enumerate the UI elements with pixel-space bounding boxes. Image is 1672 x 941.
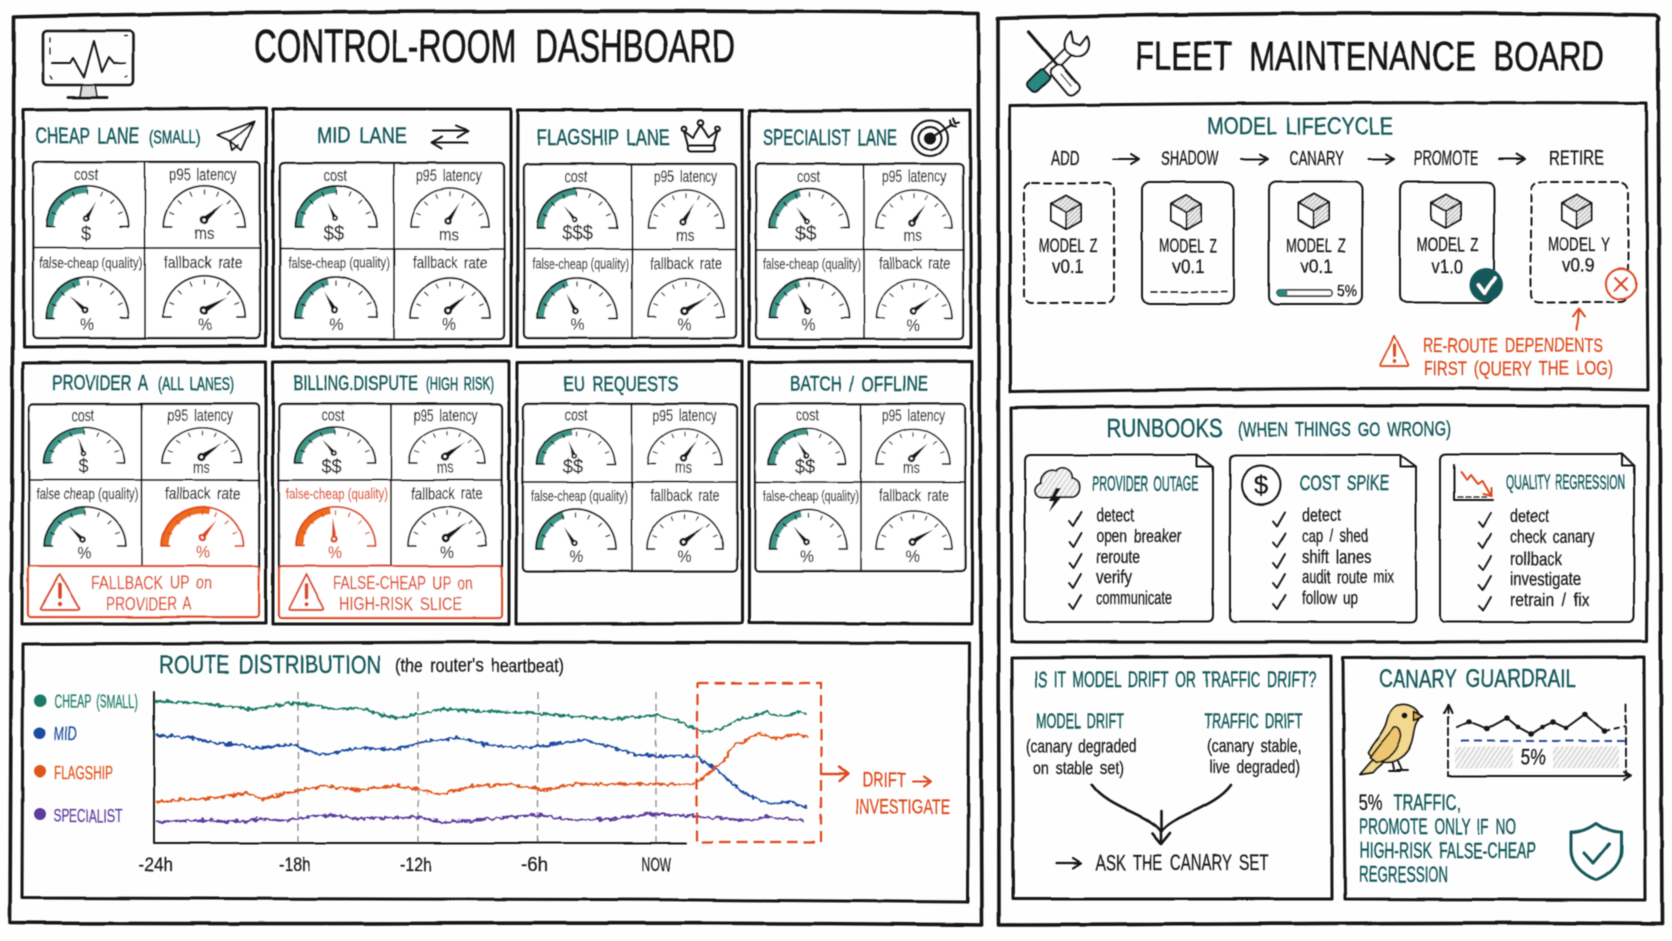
gauge: fallback rate: % (678, 547, 692, 566)
heading: cheap lane: CHEAP LANE (35, 123, 139, 148)
runbook: cost spike (1230, 455, 1416, 622)
checklist: investigate (1510, 569, 1581, 589)
title: control-room dashboard: CONTROL-ROOM DASHBOARD (254, 20, 735, 72)
gauge: cost (537, 406, 615, 478)
gauge: p95 latency: p95 latency (414, 406, 478, 425)
heading: route distribution: ROUTE DISTRIBUTION (159, 651, 381, 679)
callout: drift window (697, 683, 821, 842)
arrow: merging paths to canary set (1092, 785, 1231, 844)
icon: target with arrow (912, 118, 959, 156)
checklist (1273, 505, 1394, 609)
text: traffic drift: TRAFFIC DRIFT (1204, 710, 1303, 733)
gauge: false-cheap: false-cheap (quality) (288, 255, 390, 272)
gauge: p95 latency (876, 406, 950, 477)
gauge: p95 latency: ms (904, 226, 922, 245)
gauge: false-cheap: false-cheap (quality) (763, 256, 861, 273)
gauge grid: eu requests (523, 404, 737, 571)
checklist: detect (1302, 505, 1341, 525)
gauge grid: batch / offline (755, 404, 965, 571)
gauge: fallback rate (408, 484, 486, 562)
chart: canary guardrail: 5% (1521, 745, 1546, 770)
subheading: router's heartbeat: (the router's heartbeat) (395, 656, 564, 677)
lifecycle stage labels and arrows: PROMOTE (1414, 148, 1478, 170)
gauge: fallback rate (648, 254, 724, 334)
lifecycle stage labels and arrows: RETIRE (1549, 148, 1604, 170)
gauge: false-cheap: % (569, 547, 583, 566)
text: promotion rule: REGRESSION (1359, 862, 1448, 887)
gauge: fallback rate: % (906, 316, 920, 335)
heading: specialist lane: SPECIALIST LANE (763, 125, 897, 150)
text: promotion rule: PROMOTE ONLY IF NO (1359, 814, 1516, 839)
text: model drift: MODEL DRIFT (1036, 710, 1124, 733)
text: traffic drift (1204, 710, 1303, 777)
panel: eu requests (516, 361, 742, 624)
gauge: false cheap: % (78, 543, 92, 562)
gauge: fallback rate: fallback rate (411, 484, 483, 503)
lifecycle stage labels and arrows: ADD (1051, 148, 1080, 170)
gauge: cost: cost (796, 167, 820, 186)
alert text line 2: PROVIDER A (106, 594, 192, 614)
gauge: p95 latency: ms (194, 224, 214, 243)
text: ask the canary set (1056, 850, 1268, 875)
axis labels: -6h (521, 855, 548, 876)
gauge: p95 latency: ms (674, 458, 692, 477)
gauge grid: specialist lane (756, 164, 963, 339)
gauge: cost: $$ (322, 457, 342, 478)
text: promotion rule: HIGH-RISK FALSE-CHEAP (1359, 838, 1536, 863)
text: traffic drift: live degraded) (1209, 757, 1300, 777)
gauge: p95 latency: p95 latency (169, 165, 237, 184)
gauge: cost (46, 165, 129, 245)
stage card: retire: v0.9 (1562, 256, 1594, 277)
panel: model lifecycle (1010, 103, 1648, 392)
stage card: shadow (1142, 182, 1234, 304)
line chart: route share over time (154, 692, 808, 843)
gauge: cost: $$ (563, 457, 583, 478)
checklist: retrain / fix (1510, 590, 1589, 610)
checklist: cap / shed (1302, 526, 1368, 546)
runbook: provider outage (1025, 455, 1213, 622)
icon: monitor with heartbeat (43, 31, 133, 98)
gauge: false-cheap: % (801, 315, 815, 334)
lifecycle stage labels and arrows (1051, 148, 1604, 170)
stage card: canary: v0.1 (1300, 257, 1333, 278)
panel: flagship lane (517, 110, 743, 347)
text: promotion rule (1359, 790, 1536, 887)
panel: model drift vs traffic drift (1012, 656, 1332, 899)
heading: flagship lane: FLAGSHIP LANE (537, 125, 670, 150)
stage card: canary: MODEL Z (1286, 236, 1346, 257)
gauge: cost (44, 406, 125, 478)
gauge: cost: cost (74, 165, 98, 184)
gauge: p95 latency: p95 latency (882, 167, 946, 186)
gauge grid: mid lane (280, 163, 504, 339)
gauge: p95 latency: ms (676, 226, 694, 245)
gauge: cost: cost (322, 406, 345, 425)
gauge: fallback rate: % (198, 315, 212, 334)
gauge: false-cheap: false-cheap (quality) (531, 488, 628, 505)
lifecycle stage labels and arrows: SHADOW (1161, 148, 1218, 170)
checklist: shift lanes (1302, 547, 1371, 567)
gauge: false-cheap: false-cheap (quality) (39, 255, 143, 272)
chart: canary guardrail (1444, 705, 1631, 780)
panel: provider a (22, 362, 266, 624)
gauge: p95 latency: ms (439, 225, 459, 244)
stage card: retire (1531, 182, 1636, 302)
gauge: false-cheap alert (286, 486, 388, 562)
gauge: cost: cost (72, 406, 95, 425)
gauge: p95 latency: p95 latency (653, 406, 717, 425)
panel: control-room dashboard (10, 11, 982, 925)
gauge: fallback rate: fallback rate (650, 486, 720, 505)
gauge: fallback rate: % (678, 315, 692, 334)
runbook: cost spike: COST SPIKE (1300, 472, 1389, 495)
icon: warning triangle (289, 574, 323, 610)
checklist (1479, 506, 1595, 611)
runbook: provider outage: PROVIDER OUTAGE (1092, 473, 1199, 496)
panel: specialist lane (749, 110, 971, 347)
gauge: false-cheap alert: false-cheap (quality) (286, 486, 388, 503)
gauge: cost: $$ (324, 223, 344, 245)
checklist: audit route mix (1302, 567, 1394, 587)
gauge: fallback rate: fallback rate (164, 253, 242, 272)
gauge: cost (769, 167, 849, 245)
panel: fleet maintenance board (998, 13, 1662, 925)
gauge: p95 latency (876, 167, 952, 245)
icon: dollar circle (1242, 466, 1280, 504)
legend (34, 692, 138, 826)
heading note: all lanes: (ALL LANES) (158, 374, 234, 394)
checklist: check canary (1510, 527, 1595, 547)
text: ask the canary set: ASK THE CANARY SET (1096, 850, 1268, 875)
heading note: when things go wrong: (WHEN THINGS GO WRONG) (1238, 419, 1451, 441)
icon: storm cloud (1035, 468, 1079, 512)
panel: route distribution (22, 642, 969, 902)
gauge: fallback rate: fallback rate (412, 253, 488, 272)
stage card: retire: MODEL Y (1548, 235, 1610, 256)
gauge: cost (295, 166, 377, 245)
gauge: fallback rate (410, 253, 490, 334)
gauge: cost: $ (81, 223, 91, 245)
heading: model lifecycle: MODEL LIFECYCLE (1207, 113, 1393, 140)
gauge: false-cheap (288, 255, 390, 334)
gauge: false-cheap (531, 488, 628, 566)
text: traffic drift: (canary stable, (1207, 736, 1302, 756)
gauge: fallback rate: % (442, 315, 456, 334)
checklist: open breaker (1096, 526, 1181, 546)
heading: provider a: PROVIDER A (52, 372, 148, 395)
legend: CHEAP (SMALL) (54, 692, 138, 712)
checklist: follow up (1302, 588, 1358, 608)
text: promotion rule: 5% (1359, 790, 1383, 815)
gauge: cost: $ (78, 457, 88, 478)
icon: paper plane (217, 121, 254, 150)
gauge: p95 latency (162, 406, 242, 477)
axis labels: -18h (279, 855, 311, 876)
panel: cheap lane (23, 108, 266, 347)
gauge: false-cheap: false-cheap (quality) (532, 256, 629, 273)
axis labels: -24h (139, 855, 173, 876)
gauge: false-cheap (763, 256, 861, 334)
heading note: high risk: (HIGH RISK) (426, 374, 494, 394)
checklist: rollback (1510, 549, 1563, 569)
gauge grid: cheap lane (33, 162, 260, 338)
gauge: false-cheap (763, 488, 859, 566)
gauge: false-cheap: false-cheap (quality) (763, 488, 859, 505)
axis labels (139, 855, 671, 876)
panel: billing.dispute (273, 361, 509, 624)
gauge: cost: cost (564, 167, 588, 186)
icon: shield check (1571, 823, 1621, 880)
alert: false-cheap up on high-risk slice (279, 566, 502, 618)
gauge: fallback rate alert: fallback rate (165, 484, 240, 503)
gauge: p95 latency: p95 latency (167, 406, 233, 425)
gauge: p95 latency (409, 406, 485, 477)
heading: billing.dispute: BILLING.DISPUTE (293, 372, 418, 395)
gauge: cost: $$$ (562, 223, 594, 245)
heading: eu requests: EU REQUESTS (563, 373, 678, 396)
gauge: fallback rate (876, 486, 952, 566)
stage card: canary: 5% (1337, 283, 1357, 300)
gauge: false cheap: false cheap (quality) (36, 486, 139, 503)
legend: SPECIALIST (53, 806, 122, 826)
icon: warning triangle (41, 574, 79, 610)
gauge: fallback rate (163, 253, 246, 334)
heading: runbooks: RUNBOOKS (1107, 413, 1223, 443)
axis labels: NOW (642, 855, 671, 876)
gauge: false-cheap: % (570, 315, 584, 334)
gauge: p95 latency: ms (192, 458, 210, 477)
gauge: fallback rate (876, 254, 952, 335)
gauge: p95 latency: ms (436, 458, 454, 477)
checklist: verify (1096, 567, 1132, 587)
icon: crown (682, 120, 720, 152)
gauge: fallback rate: fallback rate (879, 254, 950, 273)
callout: drift, investigate: INVESTIGATE (855, 796, 950, 819)
axis labels: -12h (400, 855, 432, 876)
gauge: cost (768, 406, 846, 478)
stage card: shadow: MODEL Z (1159, 236, 1217, 257)
alert text line 1: FALLBACK UP on (91, 573, 212, 593)
text: model drift: on stable set) (1033, 758, 1124, 778)
runbook: quality regression (1440, 454, 1634, 622)
icon: crossed tools (1026, 31, 1089, 98)
gauge: fallback rate (647, 486, 723, 566)
icon: swap arrows (431, 126, 468, 149)
gauge: fallback rate alert: % (196, 543, 210, 562)
callout: drift, investigate: DRIFT (862, 769, 906, 792)
gauge: cost (537, 167, 617, 245)
gauge: fallback rate: % (440, 543, 454, 562)
stage card: add: v0.1 (1052, 257, 1084, 278)
gauge: p95 latency (648, 167, 724, 245)
warning: re-route dependents first (1380, 308, 1613, 380)
gauge: p95 latency: p95 latency (882, 406, 945, 425)
gauge grid: billing.dispute (279, 404, 502, 574)
heading: canary guardrail: CANARY GUARDRAIL (1379, 665, 1576, 693)
icon: falling chart (1454, 465, 1493, 500)
icon: retired x badge (1606, 269, 1636, 299)
gauge: fallback rate: fallback rate (879, 486, 949, 505)
icon: dollar circle: $ (1254, 470, 1269, 500)
gauge: cost: cost (796, 406, 819, 425)
legend: FLAGSHIP (54, 763, 113, 783)
gauge: p95 latency: p95 latency (654, 167, 717, 186)
gauge: cost: $$ (796, 223, 816, 245)
gauge: cost: cost (564, 406, 587, 425)
stage card: promote: MODEL Z (1417, 235, 1479, 256)
stage card: add: MODEL Z (1039, 236, 1098, 257)
gauge: false-cheap (532, 256, 629, 334)
stage card: promote: v1.0 (1432, 257, 1463, 278)
gauge: fallback rate: fallback rate (650, 254, 722, 273)
alert: fallback up on provider a (28, 566, 259, 617)
gauge: cost (295, 406, 375, 478)
lifecycle stage labels and arrows: CANARY (1289, 148, 1344, 170)
gauge: false-cheap: % (329, 315, 343, 334)
checklist: communicate (1096, 588, 1172, 608)
panel: batch / offline (749, 361, 972, 624)
gauge: false-cheap (39, 255, 143, 334)
gauge: cost: $$ (795, 457, 815, 478)
gauge: fallback rate: % (906, 547, 920, 566)
panel: runbooks (1011, 405, 1648, 642)
stage card: promote (1400, 182, 1503, 303)
panel: mid lane (273, 109, 511, 347)
checklist (1069, 505, 1181, 609)
heading: mid lane: MID LANE (317, 123, 407, 148)
panel: canary guardrail (1343, 657, 1645, 900)
gauge: cost: cost (323, 166, 347, 185)
gauge: false-cheap: % (80, 315, 94, 334)
gauge: p95 latency (411, 166, 489, 244)
text: promotion rule: TRAFFIC, (1394, 790, 1461, 815)
heading: batch / offline: BATCH / OFFLINE (790, 373, 928, 396)
gauge: false cheap (36, 486, 139, 562)
heading: question: IS IT MODEL DRIFT OR TRAFFIC DRIFT? (1034, 667, 1316, 692)
checklist: detect (1096, 505, 1134, 525)
alert text line 1: FALSE-CHEAP UP on (333, 573, 473, 593)
warning: re-route dependents first: FIRST (QUERY THE LOG) (1424, 358, 1613, 380)
heading note: small: (SMALL) (149, 127, 200, 147)
gauge: p95 latency (648, 406, 722, 477)
gauge: p95 latency: p95 latency (416, 166, 482, 185)
gauge grid: provider a (29, 404, 259, 574)
gauge: p95 latency (163, 165, 246, 243)
stage card: canary (1269, 182, 1362, 304)
callout: drift, investigate (821, 767, 950, 819)
checklist: detect (1510, 506, 1549, 526)
icon: canary bird (1360, 704, 1423, 775)
gauge grid: flagship lane (524, 164, 736, 338)
gauge: false-cheap alert: % (328, 543, 342, 562)
stage card: shadow: v0.1 (1172, 257, 1204, 278)
gauge: p95 latency: ms (904, 458, 920, 477)
alert text line 2: HIGH-RISK SLICE (339, 594, 462, 614)
warning: re-route dependents first: RE-ROUTE DEPENDENTS (1423, 335, 1603, 357)
gauge: fallback rate alert (162, 484, 244, 562)
gauge: false-cheap: % (800, 547, 814, 566)
legend: MID (54, 724, 77, 744)
text: model drift (1026, 710, 1136, 778)
icon: promoted check badge (1469, 268, 1503, 302)
stage card: add (1024, 183, 1114, 303)
checklist: reroute (1096, 547, 1140, 567)
text: model drift: (canary degraded (1026, 736, 1136, 756)
